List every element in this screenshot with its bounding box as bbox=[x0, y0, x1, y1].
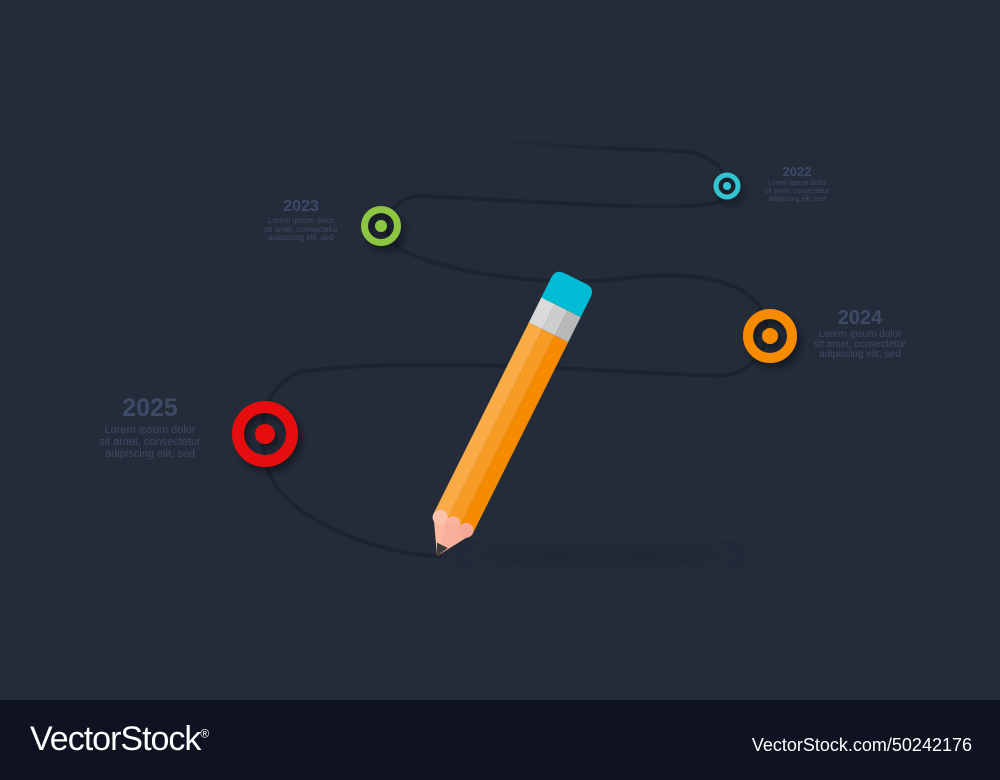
text: 2024: 2024 bbox=[838, 307, 882, 329]
marker: 2023 bbox=[364, 210, 398, 242]
text: 2025: 2025 bbox=[122, 394, 178, 422]
text: 2025 bbox=[99, 394, 201, 460]
pencil shadow bbox=[460, 548, 740, 562]
text: 2023: adipiscing elit, sed bbox=[268, 233, 334, 242]
text: 2024: adipiscing elit, sed bbox=[819, 349, 901, 360]
footer bbox=[0, 700, 1000, 780]
text: 2025: Lorem ipsum dolor bbox=[104, 424, 196, 436]
text: 2022: 2022 bbox=[783, 164, 811, 179]
pencil bbox=[417, 269, 595, 566]
marker: 2022 bbox=[716, 175, 738, 197]
text: 2022: sit amet, consectetur bbox=[765, 188, 829, 195]
text: 2025: sit amet, consectetur bbox=[99, 436, 201, 448]
text: 2023 bbox=[264, 198, 338, 242]
text: 2024: sit amet, consectetur bbox=[814, 339, 906, 350]
text: 2023: sit amet, consectetur bbox=[264, 224, 338, 234]
path line start bbox=[460, 132, 690, 152]
text: 2022 bbox=[765, 164, 830, 203]
text: 2022: adipiscing elit, sed bbox=[768, 196, 826, 203]
footer logo: VectorStock® bbox=[30, 720, 208, 758]
text: 2025: adipiscing elit, sed bbox=[105, 448, 195, 460]
text: 2024: Lorem ipsum dolor bbox=[819, 329, 901, 340]
text: 2024 bbox=[814, 307, 906, 360]
text: 2023: 2023 bbox=[283, 198, 319, 215]
text: 2023: Lorem ipsum dolor bbox=[268, 216, 334, 225]
marker: 2025 bbox=[238, 407, 292, 461]
path line bbox=[263, 152, 767, 556]
marker: 2024 bbox=[748, 314, 792, 358]
footer url: VectorStock.com/50242176 bbox=[752, 735, 972, 755]
text: 2022: Lorem ipsum dolor bbox=[768, 180, 826, 187]
